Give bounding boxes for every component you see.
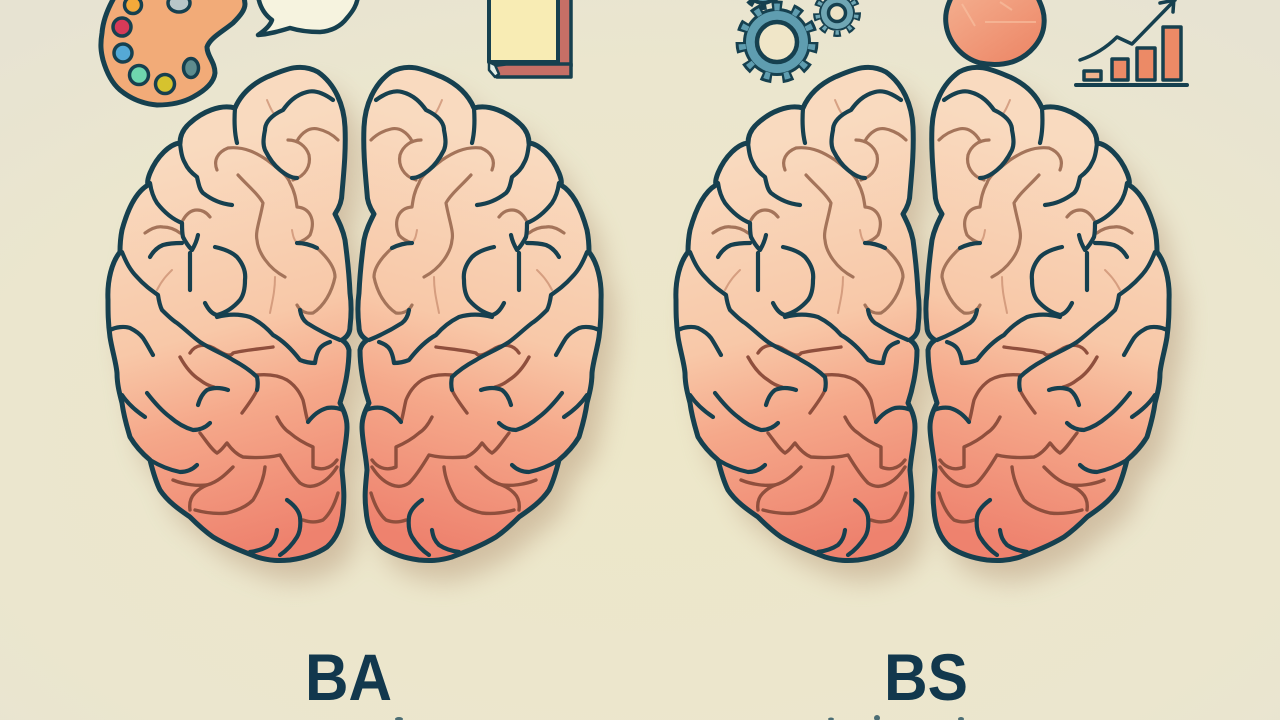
- brain shadows: [122, 87, 1183, 581]
- brain: BS: [676, 67, 1169, 561]
- icon: book: [489, 0, 571, 77]
- small top gear: [744, 0, 782, 7]
- icon: rising bar chart: [1076, 0, 1187, 85]
- small gear: [816, 0, 858, 34]
- brain: BA: [108, 67, 601, 561]
- icon: speech bubble: [258, 0, 358, 35]
- icon: gears: [740, 0, 858, 79]
- icon: orange sphere: [946, 0, 1044, 64]
- label: BS: BS: [884, 640, 968, 714]
- large gear: [740, 5, 814, 79]
- label: BA: BA: [305, 640, 392, 714]
- icon: paint palette: [101, 0, 245, 105]
